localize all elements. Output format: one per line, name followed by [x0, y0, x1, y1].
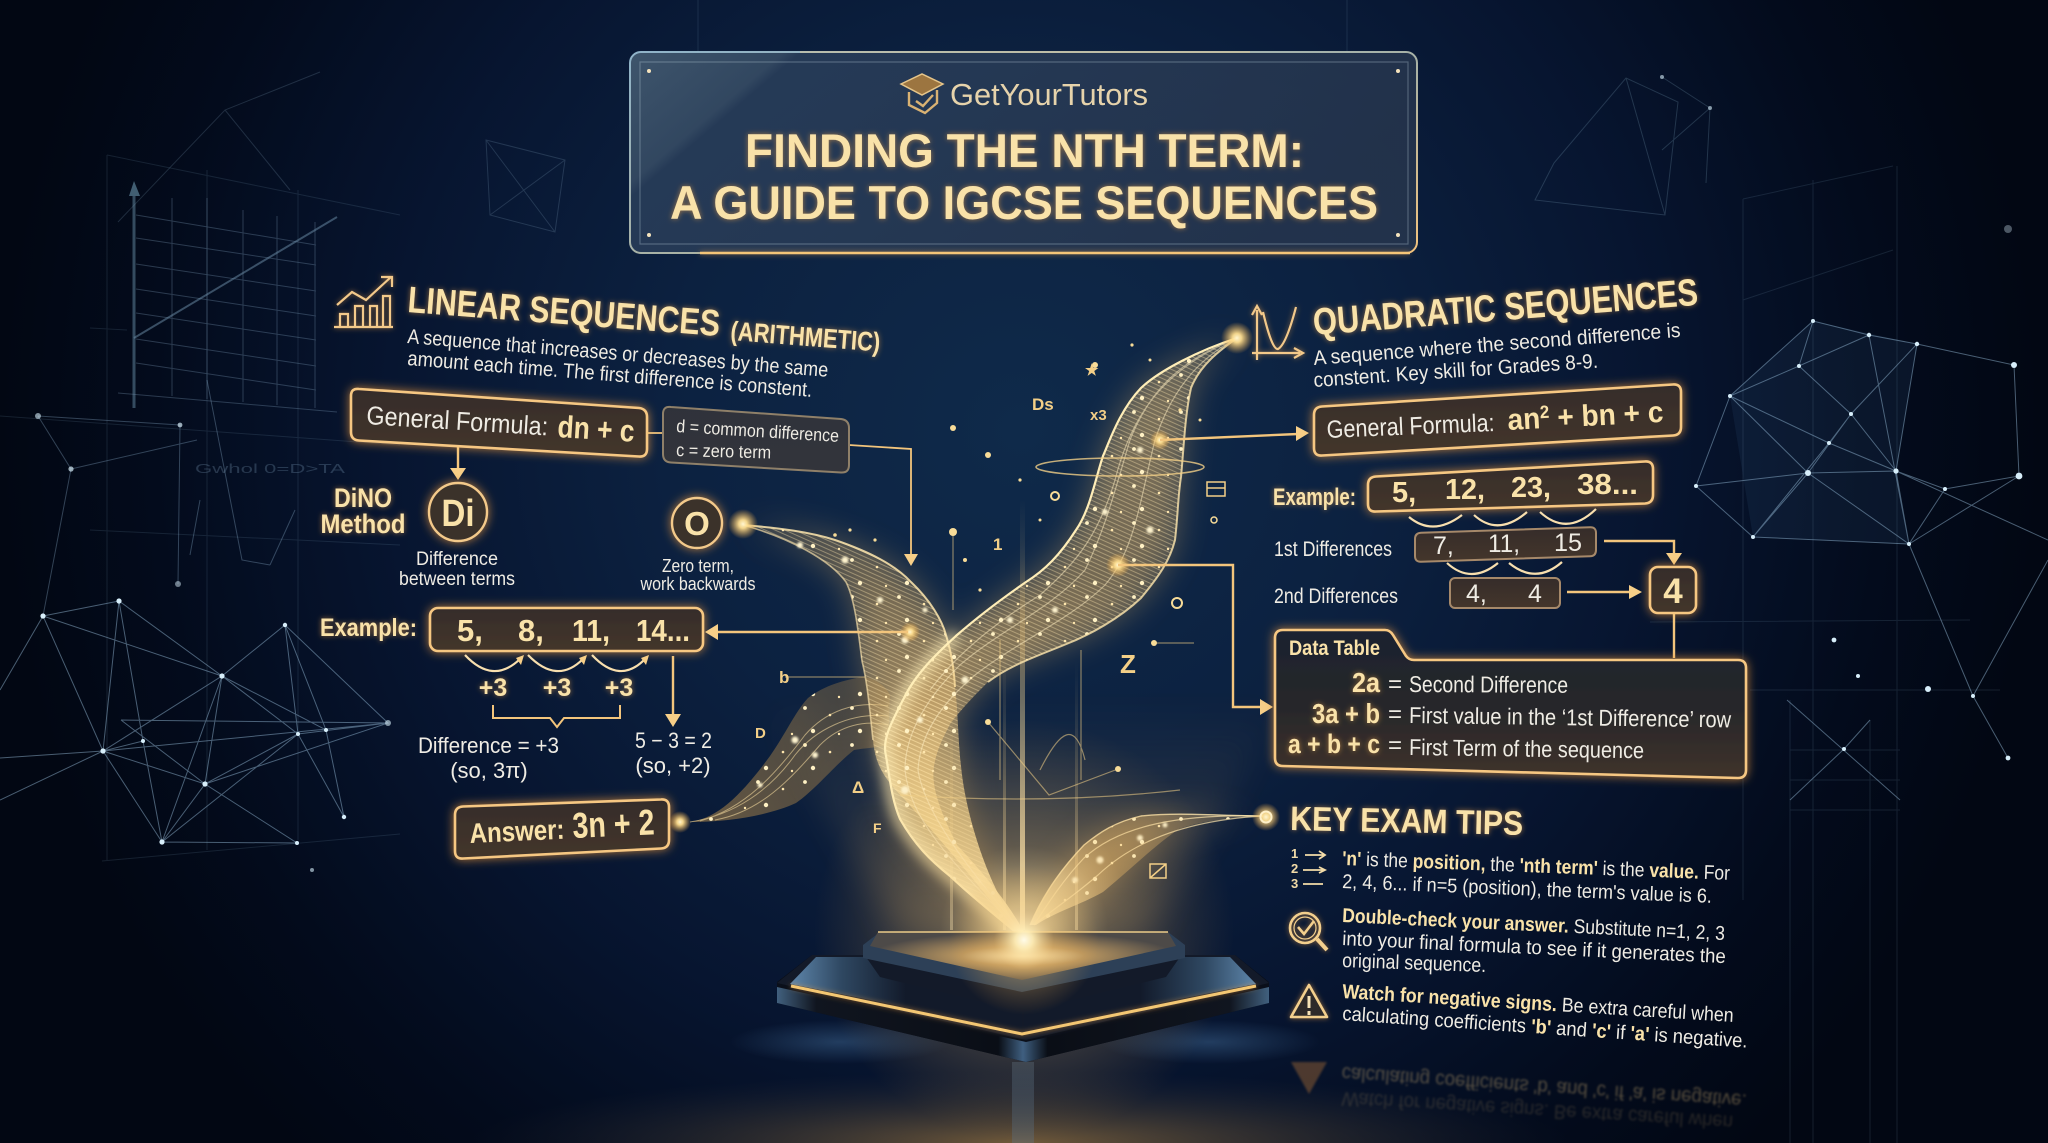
data table equals and descriptions: = [1388, 671, 1402, 698]
heading: QUADRATIC SEQUENCES [1311, 272, 1700, 344]
tip 1 text: 2, 4, 6... if n=5 (position), the term's value is 6. [1342, 871, 1712, 908]
data table formulas: 3a + b [1312, 698, 1380, 729]
general formula box [351, 389, 647, 457]
DiNO method label: Method [320, 509, 406, 539]
definitions box: d = common difference [676, 416, 840, 446]
definitions box: c = zero term [676, 440, 771, 462]
bracket [493, 705, 620, 727]
Di caption: Difference [416, 548, 498, 570]
arrow: second differences to 4 [1567, 585, 1642, 599]
DiNO method label: DiNO [334, 483, 392, 513]
data table formulas: 2a [1352, 667, 1380, 698]
icon: warning triangle [1291, 985, 1327, 1017]
tip 1 text: 'n' is the position, the 'nth term' is the value. For [1342, 848, 1731, 885]
O caption: Zero term, [662, 555, 734, 576]
source glow over platform [949, 865, 1099, 1015]
example box: 23, [1511, 472, 1551, 504]
heading: (ARITHMETIC) [730, 316, 881, 357]
arrow: ribbon to formula [1160, 426, 1309, 441]
general formula box: General Formula: [1326, 409, 1495, 444]
description [1313, 319, 1681, 392]
difference result: Difference = +3 [418, 733, 559, 758]
data table equals and descriptions: First value in the ‘1st Difference’ row [1409, 702, 1732, 732]
example box: 38... [1577, 469, 1638, 501]
ribbon: O to centre [743, 525, 1018, 930]
difference result: (so, 3π) [450, 758, 528, 783]
definitions box [647, 407, 918, 566]
answer box: 3n + 2 [572, 801, 655, 846]
data table equals and descriptions: = [1388, 732, 1402, 759]
O caption: work backwards [640, 573, 756, 594]
example box [430, 608, 703, 651]
tip 3 text [1342, 981, 1748, 1053]
ribbon: lower left to answer [690, 677, 890, 822]
answer box [455, 799, 669, 859]
Di circle [429, 483, 487, 541]
icon: rising bar chart [334, 277, 393, 327]
platform [777, 932, 1269, 1062]
data table formulas [1288, 667, 1380, 759]
central holographic ribbons [690, 338, 1263, 1140]
O circle: O [684, 505, 710, 542]
floating math symbols [755, 343, 1225, 878]
example box: 12, [1445, 474, 1485, 506]
arrow: first differences to 4 [1604, 541, 1682, 565]
+3 labels [479, 674, 633, 702]
tip 2 text: Double-check your answer. Substitute n=1, 2, 3 [1342, 905, 1725, 945]
example box: 5, [1392, 477, 1416, 509]
description: constent. Key skill for Grades 8-9. [1313, 350, 1599, 392]
result box: 4: 4 [1663, 572, 1683, 611]
Di caption [399, 548, 515, 590]
left background network: Gwhol 0=D>TA [195, 461, 346, 476]
reflection of tips: calculating coefficients 'b' and 'c' if 'a' is negative. [1341, 1062, 1747, 1112]
floating math symbols: Z [1120, 649, 1136, 679]
1st differences box: 11, [1488, 530, 1520, 558]
arrow: example to zero term [665, 656, 681, 727]
data table [1275, 630, 1746, 778]
panel: key exam tips [1290, 800, 1748, 1133]
1st differences box: 7, [1433, 532, 1454, 560]
1st differences box [1415, 527, 1596, 562]
data table title: Data Table [1289, 637, 1380, 660]
floating math symbols: F [873, 820, 882, 836]
left background network [0, 72, 565, 872]
reflection of tips [1291, 1062, 1747, 1133]
curved difference arrows [1409, 509, 1596, 574]
floor reflection [470, 1000, 1570, 1143]
+3 labels: +3 [605, 674, 633, 702]
+3 labels: +3 [543, 674, 571, 702]
+3 labels: +3 [479, 674, 507, 702]
result box: 4 [1650, 567, 1696, 613]
floating math symbols: ★ [1085, 362, 1099, 379]
icon: numbered list: 3 [1291, 876, 1298, 891]
O caption [640, 555, 756, 594]
2nd differences box: 4, [1466, 580, 1487, 608]
data table equals and descriptions: First Term of the sequence [1409, 734, 1644, 763]
difference result [418, 733, 559, 783]
background line chart [118, 181, 337, 412]
title text: FINDING THE NTH TERM: [745, 124, 1304, 177]
1st differences label: 1st Differences [1274, 538, 1392, 561]
zero term result: 5 − 3 = 2 [635, 728, 712, 753]
light source [814, 720, 1234, 1140]
connector: 4 to data table [1673, 614, 1675, 658]
panel: quadratic sequences [1118, 272, 1746, 778]
general formula box: an [1507, 402, 1543, 437]
floating math symbols: x3 [1090, 407, 1107, 424]
icon: numbered list: 2 [1291, 861, 1298, 876]
tip 2 text [1342, 905, 1726, 977]
ribbon: lower right to key exam tips [1030, 814, 1263, 925]
Di caption: between terms [399, 568, 515, 590]
arrow: ribbon to data table [1118, 565, 1273, 715]
general formula box [1314, 384, 1681, 456]
2nd differences box [1450, 578, 1560, 608]
description: A sequence where the second difference is [1313, 319, 1681, 370]
example box: 5, [457, 613, 483, 648]
logo wordmark: GetYourTutors [950, 77, 1148, 112]
general formula box: General Formula: [366, 400, 549, 441]
curved +3 arrows [465, 655, 649, 671]
example box [1368, 461, 1653, 512]
icon: parabola graph [1252, 306, 1303, 360]
connector dots [669, 322, 1280, 833]
floating math symbols: Ds [1032, 395, 1054, 414]
icon: numbered list: 1 [1291, 846, 1298, 861]
tip 1 text [1342, 848, 1731, 908]
example box: 11, [572, 613, 610, 648]
data table formulas: a + b + c [1288, 729, 1380, 759]
tip 3 text: calculating coefficients 'b' and 'c' if 'a' is negative. [1342, 1003, 1748, 1053]
example label: Example: [320, 614, 417, 642]
1st differences box: 15 [1554, 529, 1582, 557]
2nd differences label: 2nd Differences [1274, 585, 1398, 608]
title text: A GUIDE TO IGCSE SEQUENCES [670, 176, 1378, 229]
heading: LINEAR SEQUENCES [406, 279, 722, 344]
arrow: formula to Di [450, 447, 466, 480]
zero term result [635, 728, 712, 778]
general formula box: + bn + c [1549, 396, 1664, 435]
data table equals and descriptions [1388, 671, 1732, 763]
ribbon glow [743, 338, 1263, 934]
Di circle: Di [442, 493, 474, 535]
data table equals and descriptions: = [1388, 701, 1402, 728]
title panel [630, 52, 1417, 253]
icon: numbered list [1291, 846, 1325, 891]
right background network [1535, 75, 2048, 1143]
platform gold line [791, 986, 1256, 1034]
DiNO method label [320, 483, 406, 539]
ribbon sparkles [758, 447, 1168, 883]
tip 3 text: Watch for negative signs. Be extra careful when [1342, 981, 1734, 1027]
reflection of tips: Watch for negative signs. Be extra careful when [1341, 1087, 1734, 1133]
arrow: ribbon to example [705, 624, 908, 640]
icon: magnifier with check [1290, 913, 1327, 950]
floating math symbols: b [779, 668, 789, 687]
tip 2 text: original sequence. [1342, 950, 1487, 977]
title text [670, 124, 1378, 229]
logo: graduation cap [901, 74, 943, 113]
general formula box: 2 [1539, 402, 1550, 422]
heading: KEY EXAM TIPS [1290, 800, 1524, 843]
zero term result: (so, +2) [635, 753, 711, 778]
tip 2 text: into your final formula to see if it generates the [1342, 928, 1726, 968]
2nd differences box: 4 [1528, 580, 1542, 608]
answer box: Answer: [469, 814, 565, 849]
floating math symbols: Δ [852, 778, 864, 797]
example label: Example: [1273, 484, 1356, 511]
hanging lines above title [698, 0, 1347, 52]
O circle [672, 498, 722, 548]
example box: 8, [518, 613, 544, 648]
data table equals and descriptions: Second Difference [1409, 671, 1568, 698]
floating math symbols: 1 [993, 535, 1002, 554]
panel: linear sequences [320, 277, 918, 859]
ribbon: big S to quadratic [885, 338, 1237, 934]
example box: 14... [636, 613, 690, 648]
description: amount each time. The first difference is constent. [407, 347, 813, 402]
floating math symbols: D [755, 725, 766, 742]
general formula box: dn + c [557, 409, 636, 449]
description: A sequence that increases or decreases by the same [407, 325, 829, 382]
central light beams [760, 500, 1290, 935]
